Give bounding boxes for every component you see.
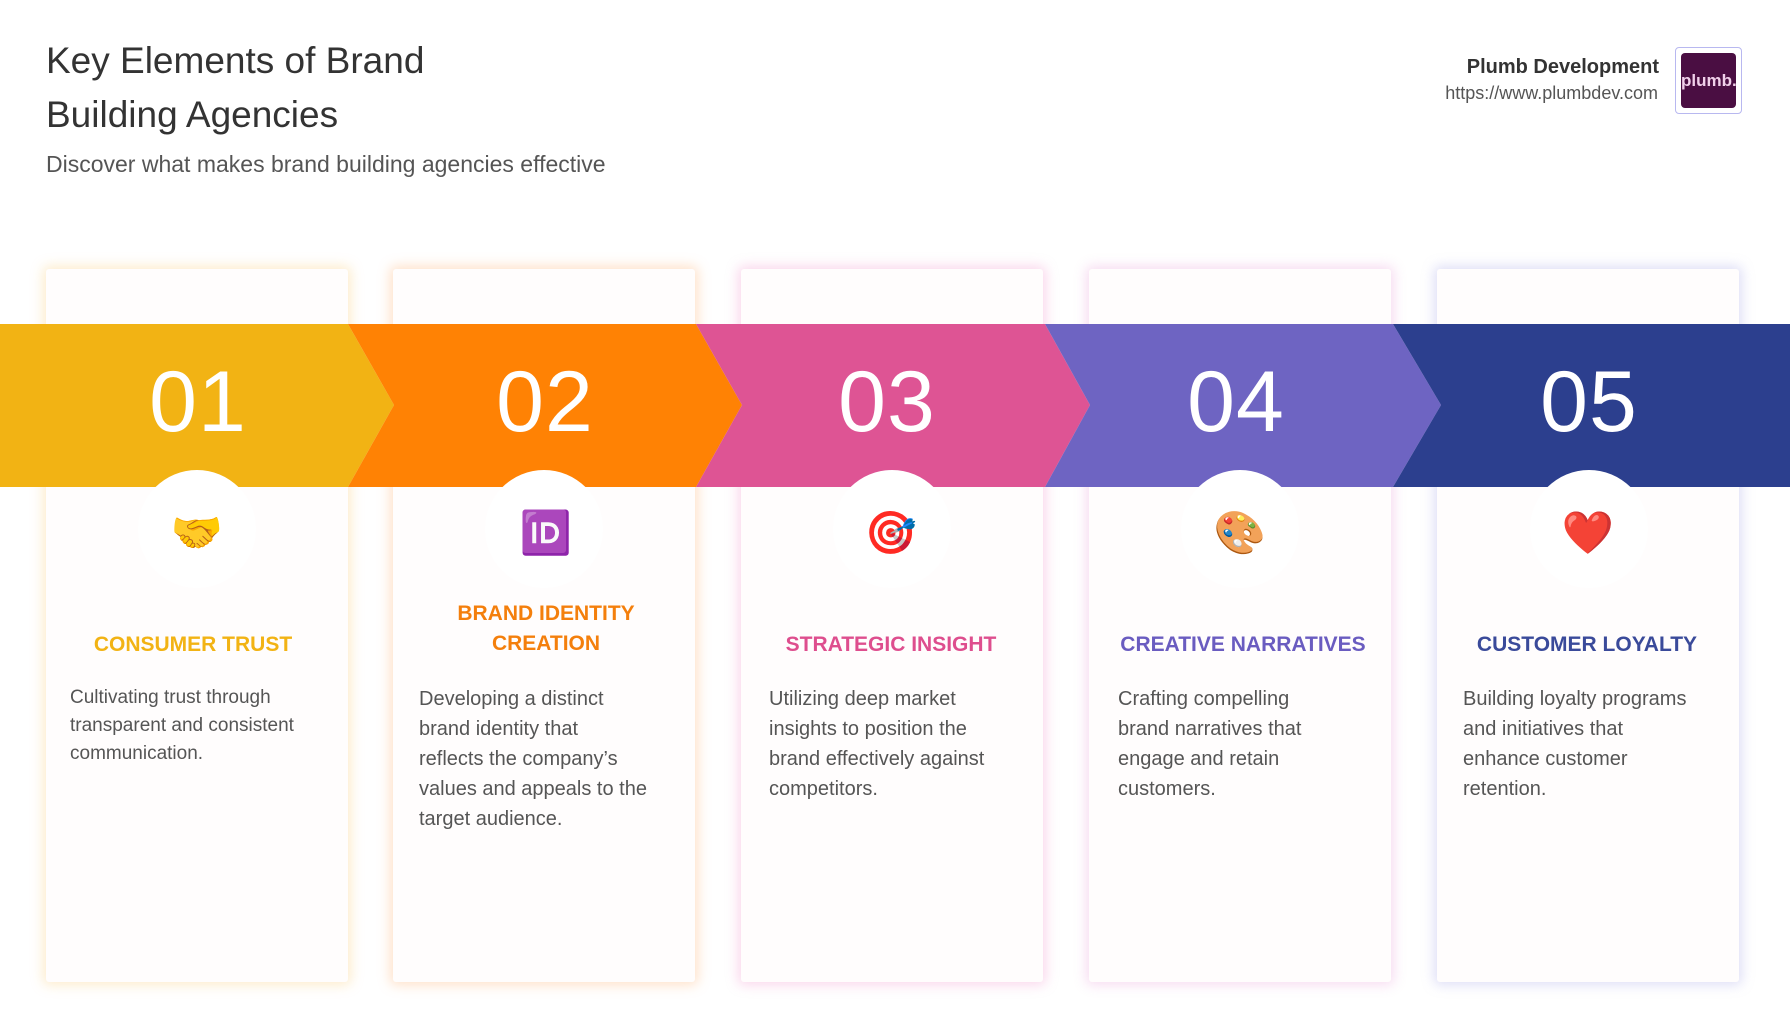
icon: heart: ❤️: [1562, 509, 1614, 558]
text 3: insights to position the: [769, 718, 967, 740]
icon: palette: 🎨: [1214, 509, 1266, 558]
title: [46, 40, 424, 135]
card 2: [393, 269, 695, 982]
heading 3: STRATEGIC INSIGHT: [786, 633, 996, 656]
text 2: Developing a distinct: [419, 688, 604, 710]
text 5: and initiatives that: [1463, 718, 1623, 740]
heading 2: BRAND IDENTITY: [457, 602, 635, 625]
icon: ID: 🆔: [520, 509, 572, 558]
text 5: [1463, 688, 1686, 800]
icon: handshake: 🤝: [171, 509, 223, 558]
text 2: brand identity that: [419, 718, 578, 740]
brand name: Plumb Development: [1467, 56, 1659, 78]
text 4: [1118, 688, 1302, 800]
card 5: [1437, 269, 1739, 982]
card 1: [46, 269, 348, 982]
text 2: [419, 688, 647, 830]
text 3: brand effectively against: [769, 748, 984, 770]
number 02: 02: [496, 354, 594, 450]
text 2: values and appeals to the: [419, 778, 647, 800]
title: Building Agencies: [46, 94, 338, 135]
title: Key Elements of Brand: [46, 40, 424, 81]
logo: [1675, 47, 1742, 114]
text 1: transparent and consistent: [70, 715, 294, 736]
text 4: brand narratives that: [1118, 718, 1301, 740]
logo: plumb.: [1681, 71, 1736, 90]
icon: target: 🎯: [865, 509, 917, 558]
text 4: Crafting compelling: [1118, 688, 1289, 710]
text 5: Building loyalty programs: [1463, 688, 1686, 710]
text 1: [70, 687, 294, 764]
text 2: reflects the company’s: [419, 748, 618, 770]
brand url: https://www.plumbdev.com: [1445, 83, 1658, 103]
card 3: [741, 269, 1043, 982]
subtitle: Discover what makes brand building agencies effective: [46, 151, 606, 177]
heading 1: CONSUMER TRUST: [94, 633, 292, 656]
heading 5: CUSTOMER LOYALTY: [1477, 633, 1697, 656]
number 04: 04: [1187, 354, 1285, 450]
chevron band: [0, 324, 1790, 487]
text 5: retention.: [1463, 778, 1546, 800]
text 3: Utilizing deep market: [769, 688, 956, 710]
card 4: [1089, 269, 1391, 982]
text 4: engage and retain: [1118, 748, 1279, 770]
text 3: [769, 688, 984, 800]
text 3: competitors.: [769, 778, 878, 800]
text 5: enhance customer: [1463, 748, 1628, 770]
number 03: 03: [838, 354, 936, 450]
text 1: communication.: [70, 743, 203, 764]
number 01: 01: [149, 354, 247, 450]
heading 2: CREATION: [492, 632, 600, 655]
text 2: target audience.: [419, 808, 562, 830]
text 1: Cultivating trust through: [70, 687, 271, 708]
heading 2: [457, 602, 635, 655]
heading 4: CREATIVE NARRATIVES: [1120, 633, 1366, 656]
number 05: 05: [1540, 354, 1638, 450]
text 4: customers.: [1118, 778, 1216, 800]
